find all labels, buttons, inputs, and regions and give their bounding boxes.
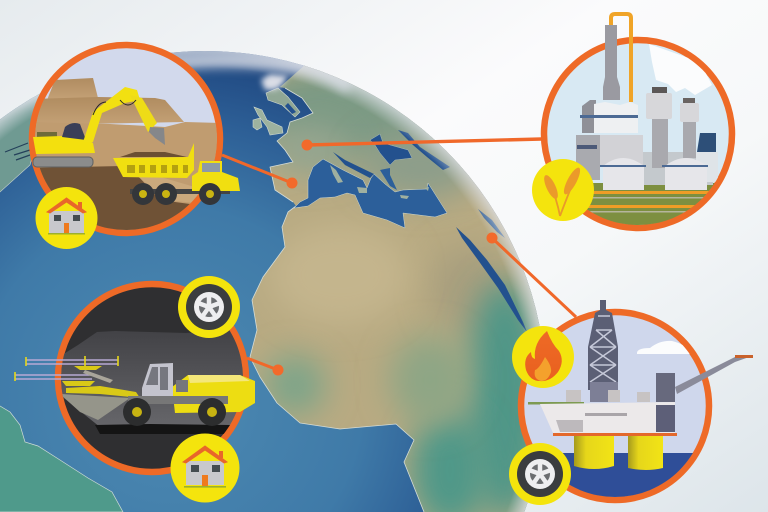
British Isles bbox=[254, 107, 283, 135]
Aegean finger bbox=[380, 168, 397, 190]
icon: house badge mine bbox=[170, 434, 240, 502]
sea and cloud bbox=[562, 340, 693, 497]
South America bbox=[0, 403, 123, 512]
icon: flame badge bbox=[512, 326, 574, 388]
panel: quarry bbox=[30, 45, 240, 240]
smoke stack bbox=[603, 25, 620, 100]
mine tunnel bbox=[60, 328, 245, 434]
land: Europe Africa Asia bbox=[250, 66, 540, 512]
Black Sea bbox=[370, 134, 412, 165]
steam bbox=[649, 44, 712, 95]
Adriatic bbox=[333, 152, 374, 178]
atmosphere rim bbox=[0, 50, 560, 512]
panel: offshore platform bbox=[520, 300, 753, 510]
panel: industrial plant bbox=[540, 14, 740, 233]
connector: Arabia to oil rig bbox=[486, 232, 576, 317]
Mediterranean bbox=[294, 159, 447, 228]
Scandinavia peninsula bbox=[266, 88, 300, 117]
Red Sea bbox=[456, 227, 527, 332]
mine ring and rock bbox=[58, 284, 246, 472]
plant ring and sky bbox=[544, 40, 732, 228]
Baltic detail bbox=[285, 103, 296, 114]
icon: tire badge mine bbox=[178, 276, 240, 338]
connector: Spain to quarry bbox=[222, 155, 298, 188]
panel: underground mine bbox=[15, 284, 255, 472]
fjord lines bbox=[5, 143, 30, 160]
derrick bbox=[588, 300, 618, 402]
deck bbox=[528, 390, 677, 436]
quarry terrain bbox=[35, 78, 217, 230]
dump truck bbox=[113, 143, 240, 205]
connector: West Africa to mine bbox=[247, 358, 284, 376]
polar haze bbox=[0, 61, 350, 112]
platform ring and sky bbox=[521, 312, 709, 500]
snow lobe bbox=[261, 74, 288, 90]
globe bbox=[0, 51, 540, 512]
Ireland bbox=[253, 118, 262, 130]
Med islands bbox=[330, 165, 429, 199]
coast outline bbox=[250, 88, 424, 512]
icon: tire badge platform bbox=[509, 443, 571, 505]
drill rig bbox=[15, 356, 255, 426]
quarry ring and sky bbox=[32, 45, 220, 233]
Caspian bbox=[398, 130, 450, 170]
icon: wheat badge bbox=[532, 159, 594, 221]
yellow pontoons bbox=[574, 436, 663, 470]
North America bbox=[0, 94, 40, 192]
icon: house badge quarry bbox=[36, 187, 98, 249]
Persian Gulf bbox=[478, 209, 505, 238]
orange pipe bbox=[611, 14, 631, 102]
plant scene bbox=[576, 44, 718, 225]
connector: France to plant bbox=[302, 139, 542, 150]
ocean bbox=[0, 50, 560, 512]
crane arm bbox=[656, 355, 753, 402]
excavator bbox=[33, 87, 165, 167]
